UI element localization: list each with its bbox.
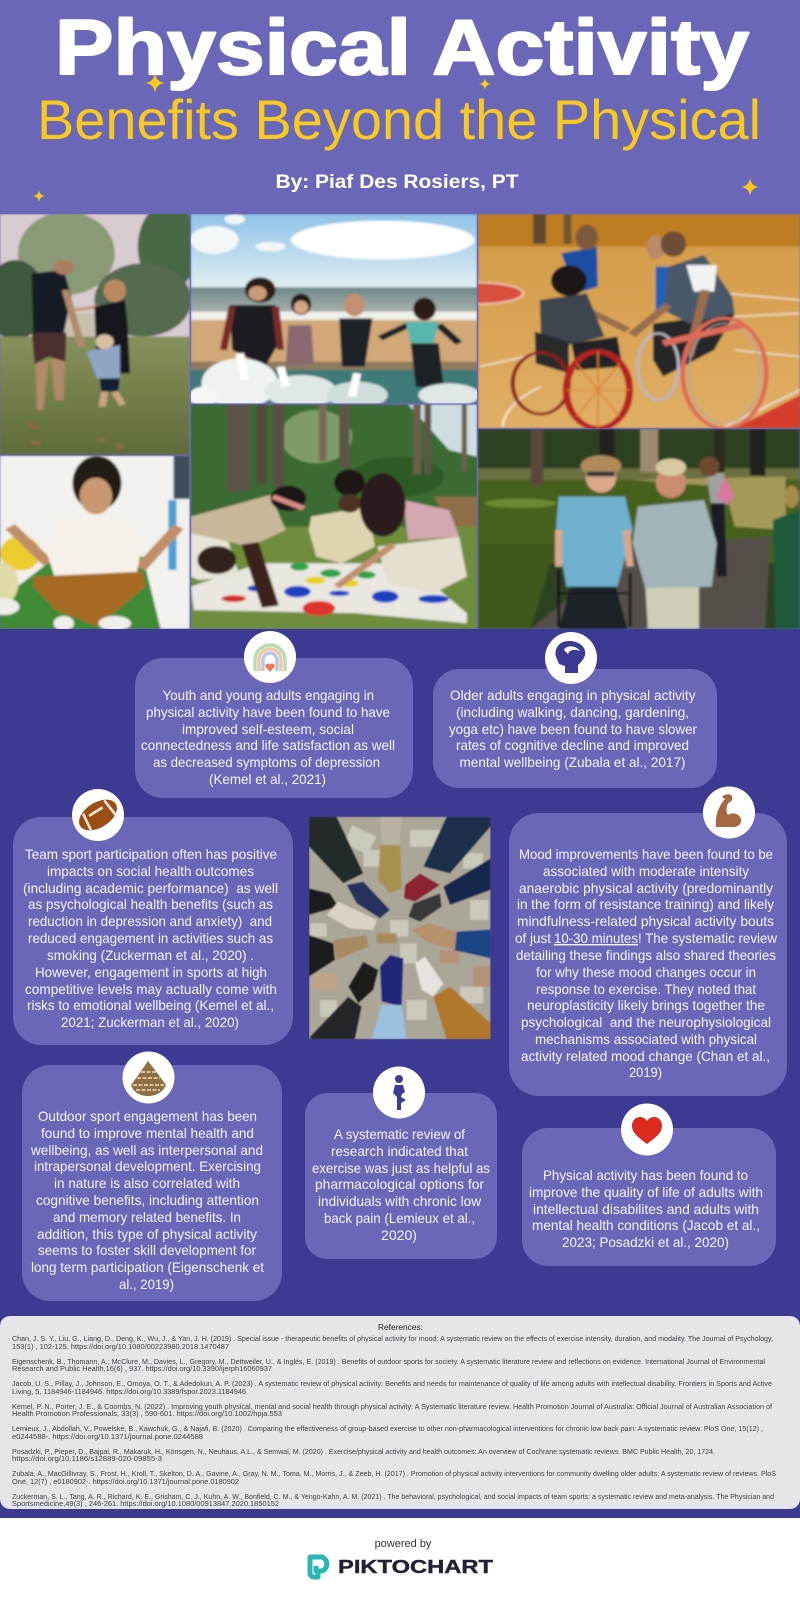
icon: person balancing: [373, 1066, 425, 1118]
panel: references: [0, 1316, 800, 1509]
text: mood benefits: in the form of resistance training) and likely: [517, 896, 774, 912]
text: quality of life findings: [529, 1167, 763, 1250]
card background: [135, 658, 413, 798]
text: team sport benefits: [23, 846, 278, 1030]
icon: heart: [621, 1104, 673, 1156]
card background: [13, 817, 293, 1045]
text: outdoor sport benefits: seems to foster skill development for: [38, 1242, 256, 1258]
card background: [522, 1128, 776, 1266]
panel: team sport: [13, 789, 293, 1045]
reference list: Living, 5, 1184946-1184946. https://doi.org/10.3389/fspor.2023.1184946: [12, 1389, 246, 1396]
text: outdoor sport benefits: intrapersonal development. Exercising: [34, 1158, 261, 1174]
icon: head with brain: [545, 632, 597, 684]
text: outdoor sport benefits: found to improve mental health and: [41, 1125, 254, 1141]
text: low back pain findings: exercise was just as helpful as: [312, 1160, 490, 1176]
reference list: Posadzki, P., Pieper, D., Bajpai, R., Makaruk, H., Könsgen, N., Neuhaus, A.L., & Semwal, M. (2020) . Exercise/physical activity and health outcomes: An overview of Cochrane systematic reviews. BMC Public Health, 20, 1724.: [12, 1449, 715, 1456]
reference list: https://doi.org/10.1186/s12889-020-09855-3: [12, 1456, 162, 1463]
card background: [509, 813, 787, 1096]
text: team sport benefits: 2021; Zuckerman et al., 2020): [61, 1014, 239, 1030]
text: team sport benefits: Team sport participation often has positive: [25, 846, 277, 862]
card background: [433, 669, 717, 788]
reference list: Kemel, P. N., Porter, J. E., & Coombs, N. (2022) . Improving youth physical, mental and social health through physical activity: A Systematic literature review. Health Promotion Journal of Australia: Official Journal of Australian Association of: [12, 1404, 772, 1411]
text: outdoor sport benefits: and memory related benefits. In: [53, 1209, 241, 1225]
photo collage: [0, 203, 800, 631]
header background: [0, 0, 800, 630]
text: low back pain findings: research indicated that: [331, 1143, 468, 1159]
text: quality of life findings: improve the quality of life of adults with: [529, 1184, 763, 1200]
text: mood benefits: [515, 846, 778, 1080]
reference list: Health Promotion Professionals, 33(3) , 590-601. https://doi.org/10.1002/hpja.553: [12, 1411, 282, 1418]
reference list: Eigenschenk, B., Thomann, A., McClure, M., Davies, L., Gregory, M., Dettweiler, U., & Inglés, E. (2019) . Benefits of outdoor sports for society. A systematic literature review and reflections on evidence. International Journal of Environmental: [12, 1359, 765, 1366]
text: mood benefits: activity related mood change (Chan et al.,: [521, 1048, 770, 1064]
text: outdoor sport benefits: long term participation (Eigenschenk et: [31, 1259, 264, 1275]
byline: By: Piaf Des Rosiers, PT: [276, 172, 519, 193]
text: team sport benefits: However, engagement in sports at high: [35, 964, 267, 980]
footer background: [0, 1518, 800, 1599]
text: team sport benefits: as psychological health benefits (such as: [28, 896, 273, 912]
icon: flexed arm: [703, 786, 755, 838]
text: outdoor sport benefits: in nature is also correlated with: [54, 1175, 240, 1191]
reference list: [12, 1336, 776, 1508]
text: low back pain findings: back pain (Lemieux et al.,: [324, 1210, 475, 1226]
text: youth benefits: (Kemel et al., 2021): [209, 771, 326, 787]
text: mood benefits: 2019): [629, 1064, 662, 1080]
logo wordmark: PIKTOCHART: [338, 1557, 493, 1577]
reference list: Lemieux, J., Abdollah, V., Powelske, B., Kawchuk, G., & Najafi, B. (2020) . Comparing the effectiveness of group-based exercise to other non-pharmacological interventions for chronic low back pain: A systematic review. PloS One, 15(12) ,: [12, 1426, 763, 1433]
main dark background: [0, 629, 800, 1518]
text: youth benefits: physical activity have been found to have: [146, 704, 390, 720]
text: mood benefits: Mood improvements have been found to be: [519, 846, 773, 862]
text: older adult benefits: (including walking, dancing, gardening,: [456, 704, 689, 720]
reference list: One, 12(7) , e0180902-. https://doi.org/10.1371/journal.pone.0180902: [12, 1479, 239, 1486]
text: older adult benefits: yoga etc) have been found to have slower: [449, 721, 697, 737]
text: mood benefits: mechanisms associated with physical: [535, 1031, 757, 1047]
text: low back pain findings: 2020): [381, 1227, 417, 1243]
text: quality of life findings: 2023; Posadzki et al., 2020): [562, 1234, 729, 1250]
photo: child meditating: [0, 456, 190, 631]
text: older adult benefits: mental wellbeing (Zubala et al., 2017): [460, 754, 686, 770]
text: youth benefits: connectedness and life satisfaction as well: [141, 737, 395, 753]
text: team sport benefits: smoking (Zuckerman et al., 2020) .: [47, 947, 254, 963]
text: team sport benefits: risks to emotional wellbeing (Kemel et al.,: [27, 997, 274, 1013]
text: team sport benefits: (including academic performance) as well: [23, 880, 278, 896]
text: mood benefits: for why these mood changes occur in: [536, 964, 756, 980]
photo: family on lawn: [0, 203, 199, 455]
panel: quality of life: [522, 1104, 776, 1266]
logo icon: [310, 1557, 327, 1577]
icon: pine cone: [122, 1052, 174, 1104]
icon: rainbow: [244, 631, 296, 683]
text: low back pain findings: individuals with chronic low: [318, 1193, 482, 1209]
text: quality of life findings: intellectual disabilites and adults with: [533, 1201, 759, 1217]
footer: powered by: powered by: [375, 1538, 432, 1550]
text: team sport benefits: competitive levels may actually come with: [25, 981, 277, 997]
card background: [22, 1065, 282, 1301]
references heading: References:: [378, 1322, 423, 1332]
text: outdoor sport benefits: addition, this type of physical activity: [37, 1226, 257, 1242]
text: mood benefits: ! The systematic review: [638, 930, 778, 946]
panel: older adults: [433, 632, 717, 788]
text: team sport benefits: impacts on social health outcomes: [47, 863, 254, 879]
photo: friends playing a floor game in the forest: [191, 404, 477, 629]
text: mood benefits: response to exercise. They noted that: [536, 981, 756, 997]
subtitle: Benefits Beyond the Physical: [37, 88, 761, 151]
text: mood benefits: neuroplasticity likely brings together the: [527, 997, 765, 1013]
reference list: Chan, J. S. Y., Liu, G., Liang, D., Deng, K., Wu, J., & Yan, J. H. (2019) . Special issue - therapeutic benefits of physical activity for mood: A systematic review on the effects of exercise intensity, duration, and modality. The Journal of Psychology,: [12, 1336, 773, 1343]
photo: wheelchair basketball players: [478, 214, 800, 428]
text: mood benefits: mindfulness-related physical activity bouts: [517, 913, 774, 929]
text: outdoor sport benefits: wellbeing, as well as interpersonal and: [30, 1142, 263, 1158]
panel: low back pain review: [305, 1066, 497, 1259]
text: older adult benefits: Older adults engaging in physical activity: [450, 687, 696, 703]
panel: outdoor sport: [22, 1052, 282, 1301]
reference list: Zuckerman, S. L., Tang, A. R., Richard, K. E., Grisham, C. J., Kuhn, A. W., Bonfield, C. M., & Yengo-Kahn, A. M. (2021) . The behavioral, psychological, and social impacts of team sports: a systematic review and meta-analysis. The Physician and: [12, 1494, 774, 1501]
text: mood benefits: 10-30 minutes: [554, 930, 638, 946]
panel: youth and young adults: [135, 631, 413, 798]
reference list: e0244588-. https://doi.org/10.1371/journal.pone.0244588: [12, 1434, 203, 1441]
text: low back pain findings: [312, 1126, 490, 1243]
text: mood benefits: anaerobic physical activity (predominantly: [519, 880, 773, 896]
photo: circle of feet on cobblestones: [309, 817, 491, 1039]
text: youth benefits: Youth and young adults engaging in: [163, 687, 374, 703]
photo: children splashing at the beach: [189, 214, 480, 408]
text: team sport benefits: reduced engagement in activities such as: [28, 930, 273, 946]
text: outdoor sport benefits: cognitive benefits, including attention: [36, 1192, 259, 1208]
photo: older couple walking in a park: [478, 429, 800, 629]
text: low back pain findings: A systematic review of: [334, 1126, 465, 1142]
references background: [0, 1316, 800, 1509]
text: quality of life findings: Physical activity has been found to: [543, 1167, 748, 1183]
text: youth benefits: as decreased symptoms of depression: [153, 754, 380, 770]
text: mood benefits: detailing these findings also shared theories: [516, 947, 776, 963]
text: team sport benefits: reduction in depression and anxiety) and: [28, 913, 272, 929]
text: youth benefits: [141, 687, 395, 787]
text: mood benefits: of just: [515, 930, 551, 946]
reference list: Sportsmedicine,49(3) , 246-261. https://doi.org/10.1080/00913847.2020.1850152: [12, 1501, 279, 1508]
sparkles: [33, 73, 759, 202]
text: mood benefits: associated with moderate intensity: [543, 863, 749, 879]
title: Physical Activity: [55, 3, 749, 91]
panel: mood improvements: [509, 786, 787, 1096]
text: outdoor sport benefits: al., 2019): [119, 1276, 174, 1292]
reference list: Research and Public Health,16(6) , 937. https://doi.org/10.3390/ijerph16060937: [12, 1366, 272, 1373]
card background: [305, 1093, 497, 1259]
icon: football: [72, 789, 124, 841]
text: low back pain findings: pharmacological options for: [315, 1176, 484, 1192]
text: outdoor sport benefits: [30, 1108, 264, 1292]
text: quality of life findings: mental health conditions (Jacob et al.,: [532, 1217, 760, 1233]
reference list: 153(1) , 102-125. https://doi.org/10.1080/00223980.2018.1470487: [12, 1344, 229, 1351]
text: older adult benefits: [449, 687, 697, 770]
text: older adult benefits: rates of cognitive decline and improved: [456, 737, 689, 753]
reference list: Jacob, U. S., Pillay, J., Johnson, E., Omoya, O. T., & Adedokun, A. P. (2023) . A systematic review of physical activity: Benefits and needs for maintenance of quality of life among adults with intellectual disability. Frontiers in Sports and Active: [12, 1381, 772, 1388]
text: youth benefits: improved self-esteem, social: [182, 721, 354, 737]
text: outdoor sport benefits: Outdoor sport engagement has been: [38, 1108, 257, 1124]
reference list: Zubala, A., MacGillivray, S., Frost, H., Kroll, T., Skelton, D. A., Gavine, A., Gray, N. M., Toma, M., Morris, J., & Zeeb, H. (2017) . Promotion of physical activity interventions for community dwelling older adults: A systematic review of reviews. PloS: [12, 1471, 776, 1478]
text: mood benefits: psychological and the neurophysiological: [521, 1014, 771, 1030]
